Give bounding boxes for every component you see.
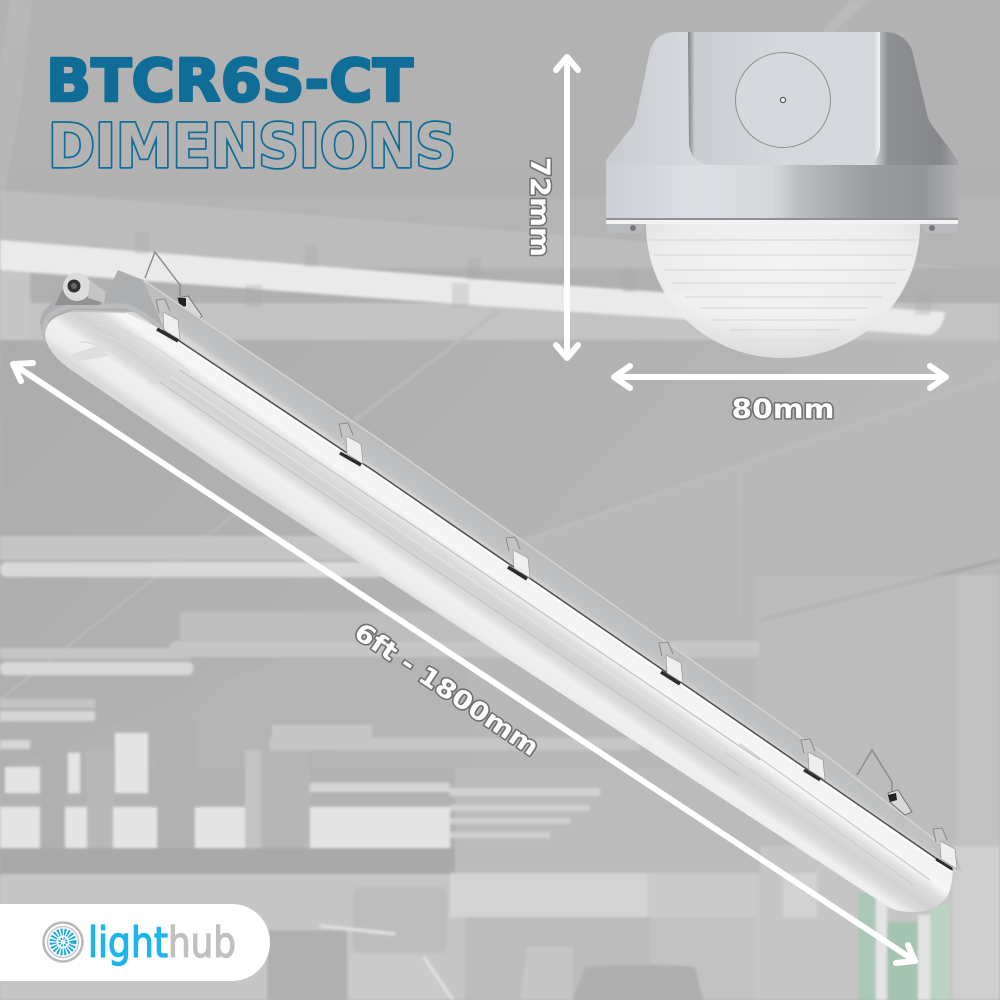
logo pill: [0, 904, 270, 981]
cars: [353, 887, 447, 953]
rear brackets: [178, 296, 912, 815]
arrow: length 1800mm: [13, 363, 915, 963]
ceiling tube light: [0, 240, 945, 335]
green parking sign stripes: [858, 893, 875, 1000]
title: [46, 47, 456, 182]
centre screw: [780, 97, 786, 103]
logo wordmark: light: [88, 918, 168, 967]
end view of fixture: [606, 32, 958, 358]
housing: [118, 272, 963, 876]
knockout circle: [736, 52, 830, 148]
label: 6ft - 1800mm: 6ft - 1800mm: [349, 617, 544, 762]
heading: product code: BTCR6S-CT: [46, 47, 413, 115]
label: 80mm: 80mm: [732, 394, 834, 425]
pillars and windows: [0, 768, 455, 878]
arrow: width 80mm: [614, 366, 946, 388]
long linear light fixture: [40, 252, 963, 912]
seam: [163, 330, 953, 870]
distant light fixtures: [0, 536, 380, 560]
cable gland: [63, 273, 106, 303]
metal band: [606, 165, 958, 219]
frosted lens: [45, 312, 953, 912]
hanging wires: [145, 252, 892, 794]
dome lens: [646, 224, 920, 358]
head cap and rim: [40, 270, 165, 340]
end cap shell: [606, 32, 958, 165]
label: 72mm: 72mm: [524, 157, 555, 257]
logo icon: [44, 922, 82, 962]
mounting clips: [156, 299, 180, 341]
logo pill: hub: [168, 918, 236, 967]
recessed panel: [688, 32, 880, 165]
lower trim: [606, 220, 958, 224]
heading: dimensions outline: DIMENSIONS: [48, 111, 456, 182]
arrow: height 72mm: [556, 57, 578, 358]
